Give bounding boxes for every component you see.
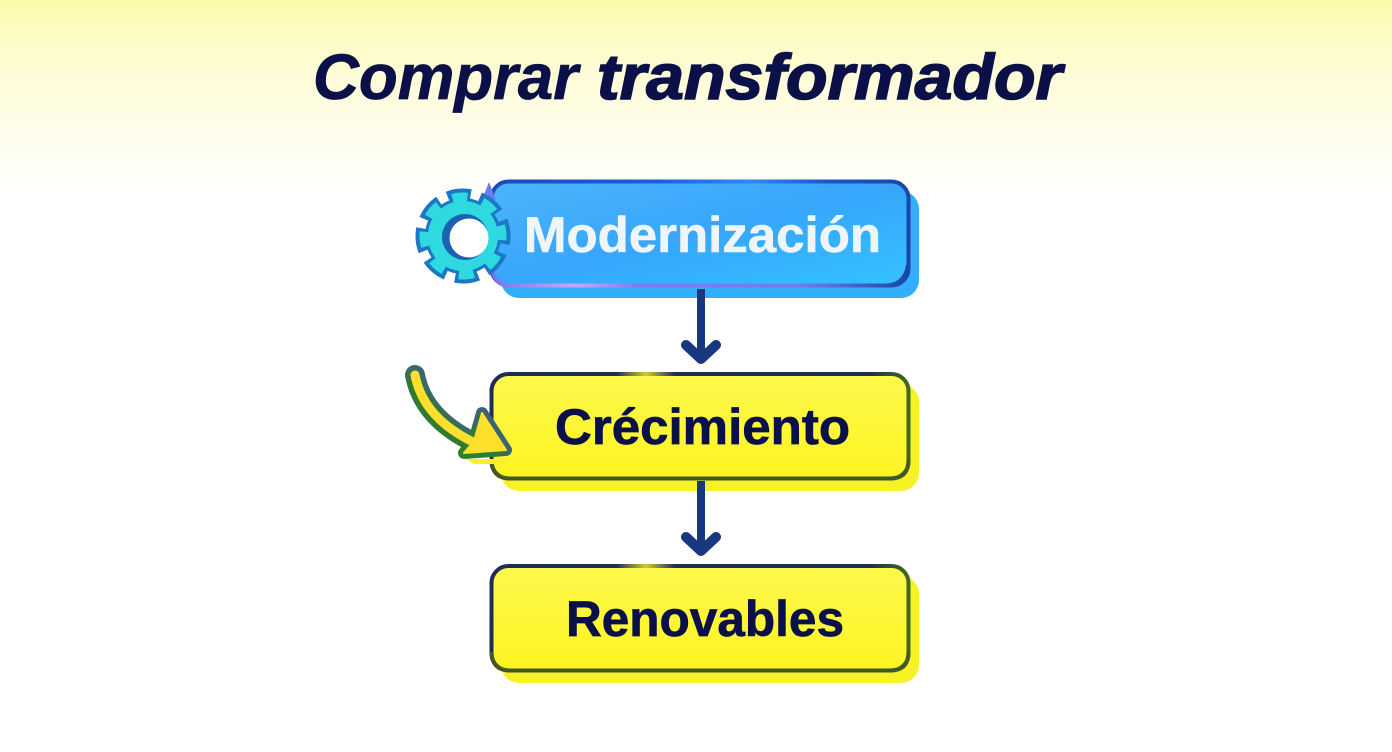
connector arrow: Crecimiento to Renovables: [686, 481, 716, 551]
background gradient: [0, 0, 1392, 195]
title: [313, 41, 1065, 113]
title: Comprar: [313, 41, 581, 113]
box: Crecimiento: [492, 374, 919, 491]
title: transformador: [597, 41, 1065, 113]
icon: gear: [420, 182, 506, 279]
label: Renovables: Renovables: [566, 591, 844, 647]
box: Modernización: [492, 182, 919, 298]
icon: curved yellow arrow: [415, 375, 510, 464]
box: Renovables: [492, 566, 919, 683]
connector arrow: Modernización to Crecimiento: [686, 289, 716, 359]
label: Crécimiento: Crécimiento: [555, 399, 850, 455]
label: Modernización: Modernización: [524, 207, 881, 263]
